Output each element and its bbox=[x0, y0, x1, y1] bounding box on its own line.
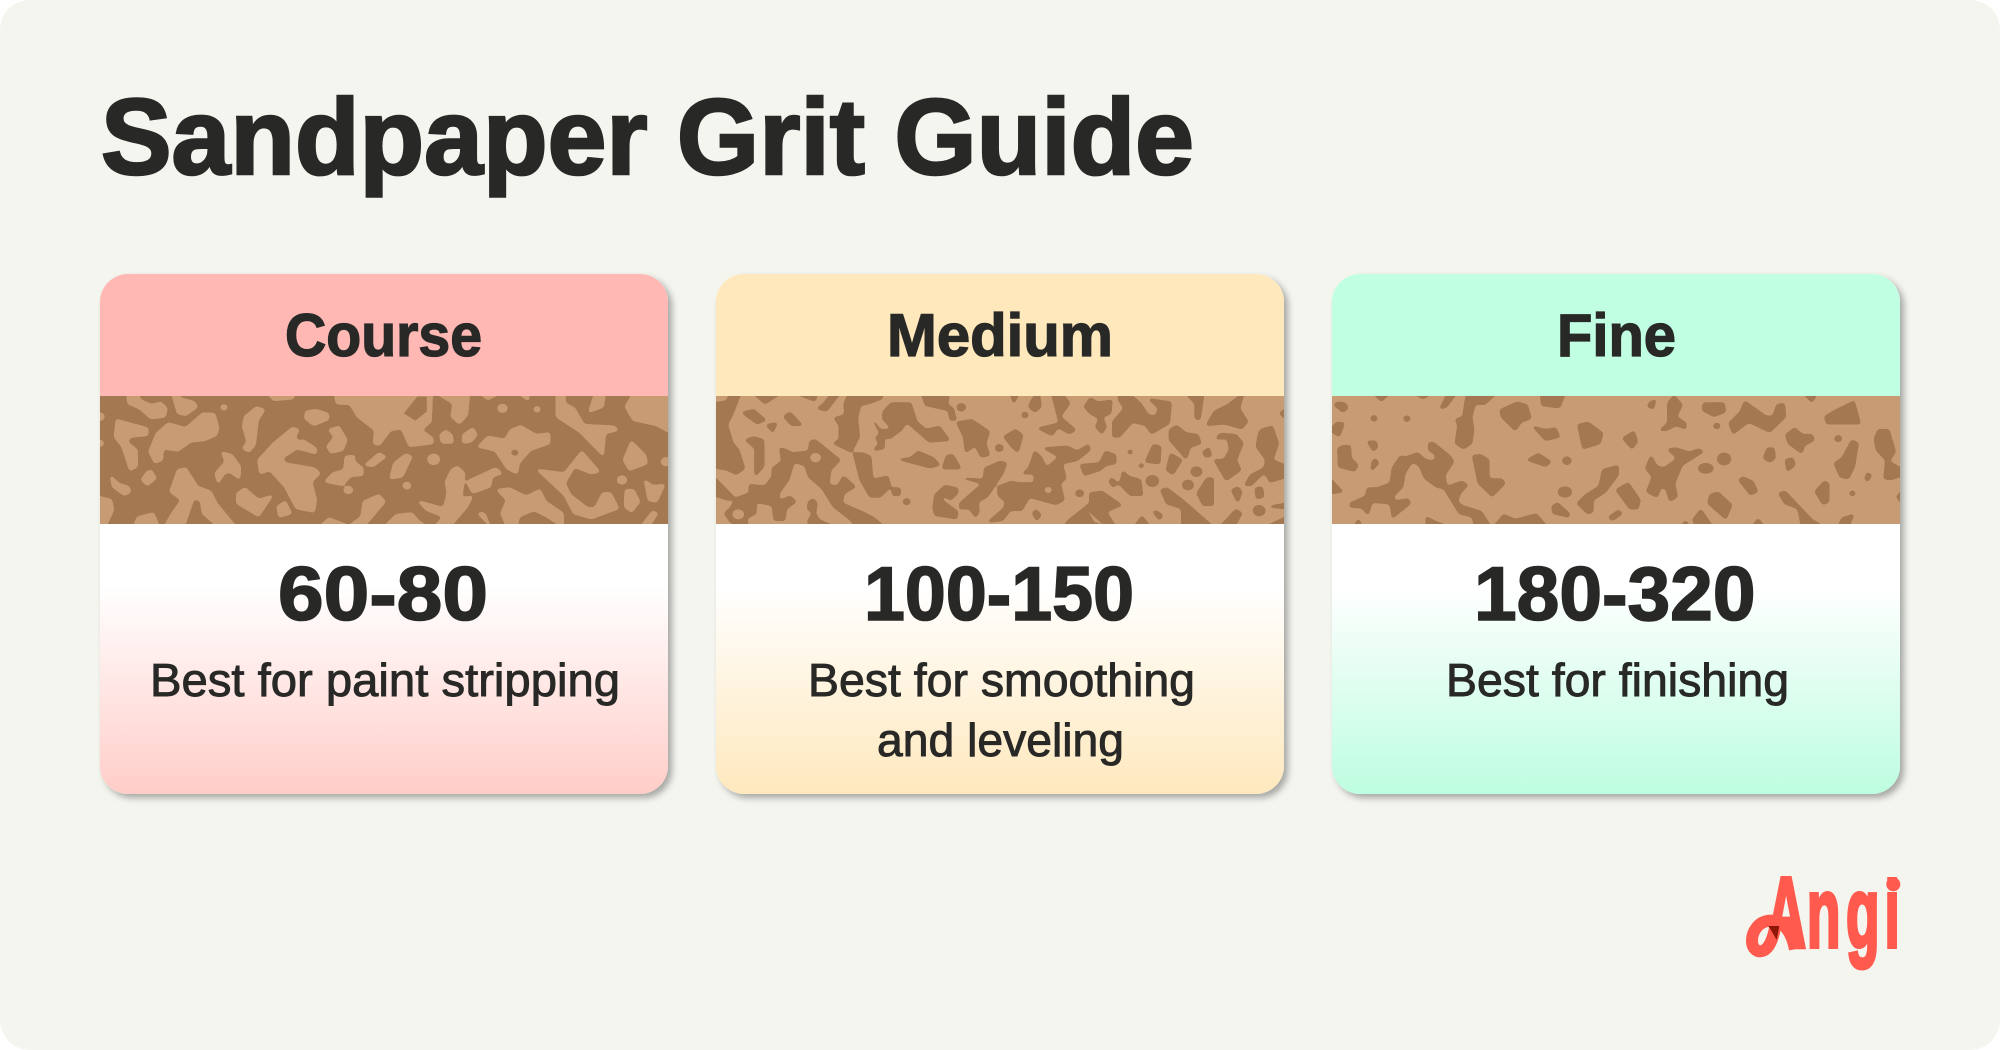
grit range: 180-320: 180-320 bbox=[1474, 552, 1756, 637]
grit range: 100-150: 100-150 bbox=[864, 552, 1134, 637]
panel: fine grit card bbox=[1330, 274, 1904, 794]
use text: Best for paint stripping bbox=[150, 654, 620, 706]
texture: medium sandpaper bbox=[713, 393, 1287, 527]
panel: medium grit card bbox=[713, 274, 1287, 794]
grit range: 60-80: 60-80 bbox=[278, 552, 488, 637]
use text: Best for finishing bbox=[1446, 654, 1789, 706]
panel: coarse grit card bbox=[96, 274, 672, 794]
card heading: Fine: Fine bbox=[1557, 302, 1676, 369]
use text: and leveling bbox=[877, 714, 1124, 766]
card heading: Course: Course bbox=[285, 302, 482, 369]
texture: fine sandpaper bbox=[1330, 393, 1904, 527]
title: Sandpaper Grit Guide bbox=[101, 76, 1194, 197]
card heading: Medium: Medium bbox=[887, 302, 1113, 369]
use text: Best for smoothing bbox=[808, 654, 1195, 706]
logo: Angi: Angi bbox=[1766, 858, 1900, 969]
use text bbox=[808, 654, 1195, 766]
texture: coarse sandpaper bbox=[96, 393, 672, 527]
